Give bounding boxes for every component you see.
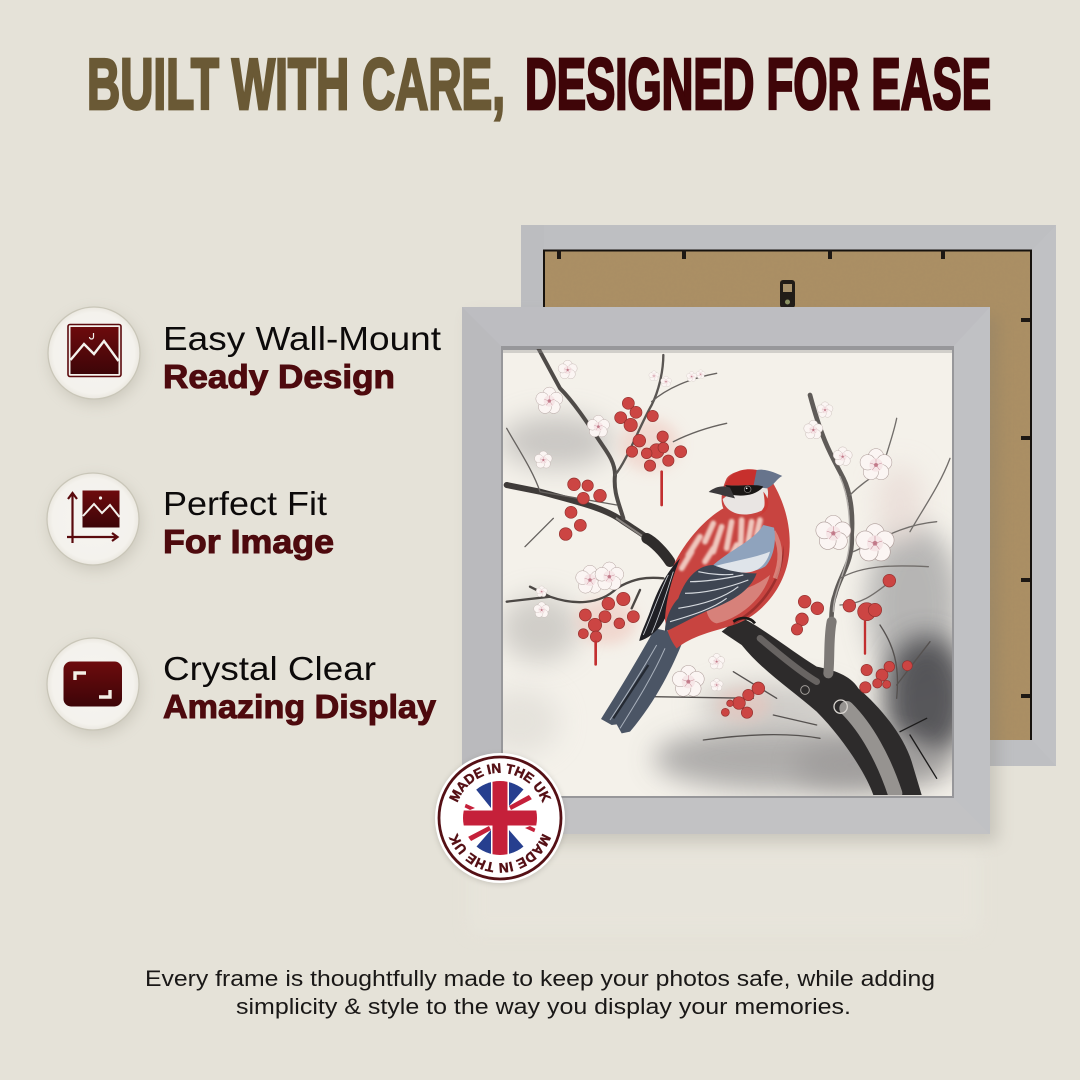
covert feathers [712, 525, 775, 572]
feature: easy wall-mount [48, 307, 441, 403]
retaining clips [557, 250, 1030, 698]
primary edge [639, 558, 680, 641]
backing board [544, 250, 1032, 740]
artwork: bird on blossom branch [480, 348, 970, 795]
title: BUILT WITH CARE, [87, 45, 505, 125]
wing [665, 565, 757, 632]
frame reflection [470, 848, 980, 933]
feature text: Crystal Clear [163, 650, 376, 687]
footer text: Every frame is thoughtfully made to keep your photos safe, while adding [145, 966, 935, 991]
trunk [647, 538, 922, 795]
feature text [163, 320, 441, 395]
feature text: Amazing Display [163, 688, 437, 725]
wall hanger [780, 280, 795, 308]
paint drips [596, 472, 865, 664]
crown [726, 469, 757, 485]
beak [709, 486, 735, 498]
eye mask [725, 485, 763, 496]
footer text: simplicity & style to the way you display your memories. [236, 994, 851, 1019]
branches [507, 348, 950, 793]
berries [559, 397, 912, 718]
icon: screen with corner marks [47, 638, 140, 734]
icon: framed picture with hook [48, 307, 141, 403]
face [723, 487, 768, 515]
feature: perfect fit [47, 473, 334, 569]
pale mantle streaks [682, 520, 760, 568]
tail [601, 628, 685, 733]
badge lettering: MADE IN THE UK [448, 832, 552, 873]
feature text: Perfect Fit [163, 485, 327, 522]
frame inner shading [503, 350, 952, 353]
icon: picture with dimension arrows [47, 473, 140, 569]
badge lettering: MADE IN THE UK [448, 763, 552, 804]
blossoms [534, 360, 894, 696]
feature: crystal clear [47, 638, 437, 734]
front frame [462, 307, 998, 842]
ink washes [480, 415, 970, 792]
feature text [163, 485, 334, 560]
body [664, 470, 790, 648]
union flag [463, 781, 537, 855]
footer text [145, 966, 935, 1019]
feature text: Ready Design [163, 358, 395, 395]
badge: made in the UK [433, 752, 566, 886]
feature text [163, 650, 437, 725]
bird [601, 469, 790, 733]
feature text: Easy Wall-Mount [163, 320, 441, 357]
badge lettering [448, 763, 552, 873]
feature text: For Image [163, 523, 334, 560]
back of frame [521, 225, 1056, 766]
